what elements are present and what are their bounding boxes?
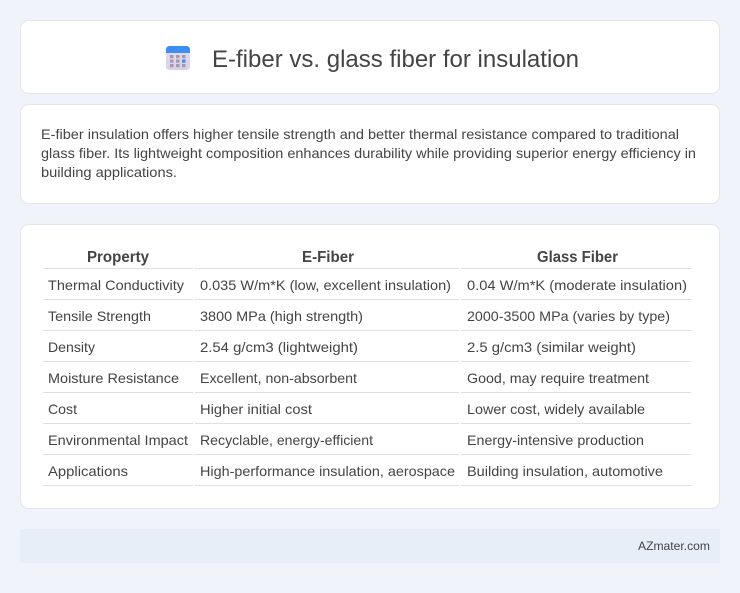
row: environmental impact: Recyclable, energy-efficient [200,432,373,448]
description text: glass fiber. Its lightweight composition enhances durability while providing superior energy efficiency in [41,145,696,161]
footer credit: AZmater.com [638,539,710,553]
row: density: 2.54 g/cm3 (lightweight) [200,339,358,355]
table header: Glass Fiber [537,249,618,266]
row: moisture resistance: Excellent, non-absorbent [200,370,357,386]
footer [20,529,720,563]
row: tensile strength: 2000-3500 MPa (varies by type) [467,308,670,324]
row: environmental impact: Environmental Impact [48,432,188,448]
row: applications: Applications [48,463,128,479]
row: environmental impact [48,432,644,448]
row: cost: Higher initial cost [200,401,312,417]
icon: calendar [166,46,190,70]
row: thermal conductivity [48,277,687,293]
description text [41,126,696,180]
row: tensile strength [48,308,670,324]
row: tensile strength: Tensile Strength [48,308,151,324]
panel: description [20,104,720,204]
row: thermal conductivity: 0.04 W/m*K (moderate insulation) [467,277,687,293]
row: tensile strength: 3800 MPa (high strength) [200,308,363,324]
row: cost [48,401,645,417]
row: applications [48,463,663,479]
panel: comparison table [20,224,720,508]
row: moisture resistance [48,370,649,386]
row: thermal conductivity: Thermal Conductivity [48,277,184,293]
description text: E-fiber insulation offers higher tensile strength and better thermal resistance compared to traditional [41,126,679,142]
row: environmental impact: Energy-intensive production [467,432,644,448]
row: density: Density [48,339,95,355]
row: thermal conductivity: 0.035 W/m*K (low, excellent insulation) [200,277,451,293]
description text: building applications. [41,164,177,180]
row: cost: Cost [48,401,77,417]
table header [87,249,618,266]
panel: title [20,20,720,94]
row: cost: Lower cost, widely available [467,401,645,417]
row: density [48,339,636,355]
table header: E-Fiber [302,249,354,266]
row: applications: High-performance insulation, aerospace [200,463,455,479]
row: moisture resistance: Good, may require treatment [467,370,649,386]
table header: Property [87,249,149,266]
row: density: 2.5 g/cm3 (similar weight) [467,339,636,355]
row: moisture resistance: Moisture Resistance [48,370,179,386]
title text: E-fiber vs. glass fiber for insulation [212,46,579,73]
row: applications: Building insulation, automotive [467,463,663,479]
